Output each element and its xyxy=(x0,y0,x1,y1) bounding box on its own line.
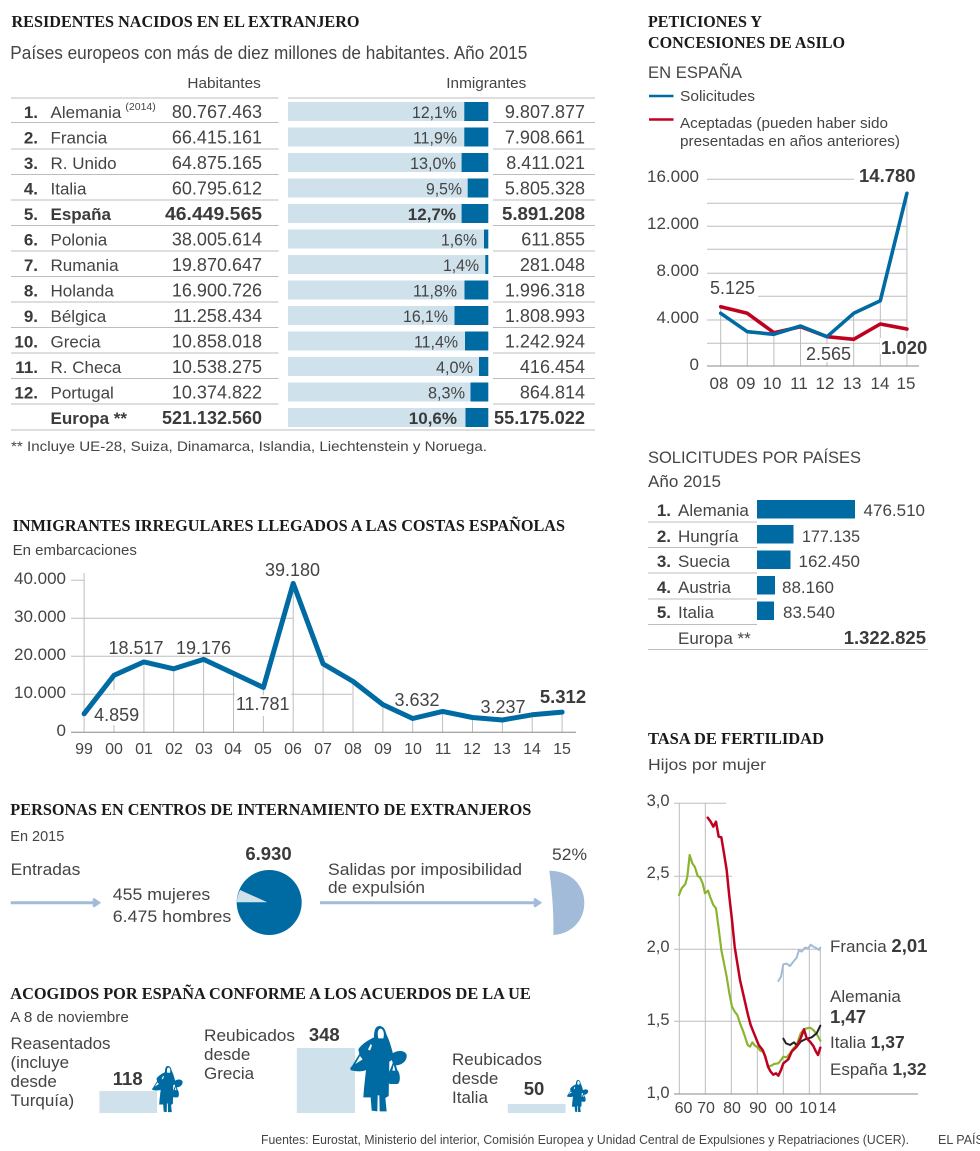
label: reasentados xyxy=(10,1034,110,1110)
label: reasentados: (incluye xyxy=(10,1053,69,1072)
x axis labels: 11 xyxy=(435,741,451,758)
table: rank column: 11. xyxy=(15,358,38,377)
table: country column: Rumania xyxy=(50,256,119,275)
table: rank column: 10. xyxy=(14,332,38,352)
ranks: 3. xyxy=(657,552,671,571)
heading: inmigrantes irregulares: INMIGRANTES IRREGULARES LLEGADOS A LAS COSTAS ESPAÑOLAS xyxy=(13,516,565,535)
x axis labels: 14 xyxy=(871,374,889,393)
table: habitantes column: 16.900.726 xyxy=(172,280,262,300)
x axis labels: 09 xyxy=(737,374,755,393)
line chart: fertility curves xyxy=(679,818,820,1076)
ranks: 5. xyxy=(657,603,671,622)
country names: Hungría xyxy=(678,527,739,546)
line: Francia xyxy=(778,945,820,981)
y axis labels: 0 xyxy=(57,721,66,740)
arrow: entradas xyxy=(11,899,99,906)
line: España xyxy=(708,818,820,1076)
y axis labels: 12.000 xyxy=(647,214,699,233)
table: inmigrantes column: 1.996.318 xyxy=(505,280,585,300)
line chart: solicitudes xyxy=(721,193,907,337)
table: habitantes column: 80.767.463 xyxy=(172,102,262,122)
subtitle: en España: EN ESPAÑA xyxy=(648,63,743,82)
panel: residentes nacidos en el extranjero xyxy=(10,12,595,454)
x axis labels: 02 xyxy=(165,741,183,758)
x axis labels: 15 xyxy=(553,741,571,758)
bar: Italia 50 xyxy=(508,1104,566,1113)
table: percentages: 1,4% xyxy=(443,256,479,275)
data labels: 2.565 xyxy=(806,344,851,364)
x axis labels: 08 xyxy=(344,741,362,758)
table: inmigrantes column: 611.855 xyxy=(521,230,585,250)
table: habitantes column: 46.449.565 xyxy=(165,203,262,224)
legend: Solicitudes xyxy=(680,88,755,105)
values: 1.322.825 xyxy=(844,627,926,648)
data labels: 39.180 xyxy=(265,560,320,580)
panel: tasa de fertilidad xyxy=(647,729,927,1117)
data labels: 11.781 xyxy=(236,694,290,714)
table: percentages xyxy=(403,103,479,428)
panel: peticiones de asilo xyxy=(647,12,930,393)
x axis labels: 13 xyxy=(493,741,511,758)
subtitle: residentes: Países europeos con más de diez millones de habitantes. Año 2015 xyxy=(10,43,527,63)
x axis labels: 13 xyxy=(843,374,861,393)
x axis labels: 70 xyxy=(697,1100,715,1117)
table: inmigrantes column: 864.814 xyxy=(520,382,585,402)
label: reasentados: Reasentados xyxy=(10,1034,110,1053)
table: percentages: 13,0% xyxy=(410,154,456,173)
table: country column: Holanda xyxy=(50,282,114,300)
label: salidas xyxy=(328,860,522,897)
label: reubicados desde Italia: desde xyxy=(452,1069,498,1088)
table: country column: Francia xyxy=(50,128,108,148)
label: reubicados desde Grecia xyxy=(204,1026,295,1083)
bars: percentage of immigrants xyxy=(288,102,488,427)
table: country column: Alemania xyxy=(50,103,122,122)
table: rank column: 9. xyxy=(24,307,38,326)
x axis labels: 10 xyxy=(404,741,422,758)
table: habitantes column: 38.005.614 xyxy=(172,230,262,250)
table: habitantes column: 10.858.018 xyxy=(172,332,262,352)
y axis labels: 30.000 xyxy=(14,607,66,626)
table: country column: Italia xyxy=(50,180,87,198)
y axis labels: 3,0 xyxy=(647,792,670,810)
y axis labels: 2,0 xyxy=(647,938,670,956)
table: percentages: 11,9% xyxy=(413,128,457,148)
heading: residentes: RESIDENTES NACIDOS EN EL EXTRANJERO xyxy=(12,12,360,31)
series labels: Francia 2,01 xyxy=(830,935,927,956)
data labels: 3.632 xyxy=(394,690,440,710)
country names: Alemania xyxy=(678,501,749,520)
series labels xyxy=(830,935,927,1079)
table: inmigrantes column: 8.411.021 xyxy=(506,153,585,173)
x axis labels: 08 xyxy=(710,374,728,393)
x axis labels: 04 xyxy=(224,741,242,758)
y axis labels: 1,0 xyxy=(647,1084,670,1102)
country names: Austria xyxy=(678,578,731,597)
line chart: irregular arrivals xyxy=(84,583,562,720)
table: inmigrantes column: 1.808.993 xyxy=(505,306,585,326)
x axis labels: 01 xyxy=(135,741,153,758)
value: 348: 348 xyxy=(309,1024,340,1045)
table: inmigrantes column xyxy=(494,102,585,428)
x axis labels: 00 xyxy=(105,741,123,758)
values: 177.135 xyxy=(802,527,860,546)
text: mujeres y hombres xyxy=(113,885,231,926)
label: reubicados desde Italia: Reubicados xyxy=(452,1050,542,1069)
arrow: salidas xyxy=(320,899,540,906)
x axis labels: 14 xyxy=(523,741,541,758)
half pie: 52% xyxy=(549,871,584,935)
panel: solicitudes por países xyxy=(648,448,928,650)
table: rank column: 6. xyxy=(24,230,38,250)
x axis labels: 90 xyxy=(749,1100,767,1117)
table: habitantes column: 60.795.612 xyxy=(172,178,262,198)
source line: Fuentes: Eurostat, Ministerio del interior, Comisión Europea y Unidad Central de Expulsiones y Repatriaciones (UCER). xyxy=(261,1133,909,1147)
values: 83.540 xyxy=(783,603,835,622)
data labels: 4.859 xyxy=(94,705,139,725)
values: 162.450 xyxy=(799,552,860,571)
x axis labels: 00 xyxy=(775,1100,793,1117)
data labels: 3.237 xyxy=(480,697,526,717)
table: habitantes column: 10.538.275 xyxy=(172,357,262,377)
table: inmigrantes column: 5.805.328 xyxy=(505,178,585,198)
table: country column: (2014) xyxy=(125,101,156,113)
y axis labels: 20.000 xyxy=(14,645,66,664)
icon: person small xyxy=(152,1066,183,1112)
heading: peticiones xyxy=(648,12,845,52)
label: entradas: Entradas xyxy=(11,860,80,879)
data labels: 19.176 xyxy=(176,638,231,658)
x axis labels xyxy=(75,741,571,758)
ranks: 1. xyxy=(657,501,671,520)
table: rank column: 7. xyxy=(24,256,38,275)
data labels: 14.780 xyxy=(859,165,916,186)
x axis labels: 05 xyxy=(254,741,272,758)
y axis labels: 2,5 xyxy=(647,864,670,882)
heading: centros de internamiento: PERSONAS EN CENTROS DE INTERNAMIENTO DE EXTRANJEROS xyxy=(10,800,531,819)
label: salidas: Salidas por imposibilidad xyxy=(328,860,522,879)
table: habitantes column xyxy=(162,102,262,428)
label: reubicados desde Italia: Italia xyxy=(452,1088,488,1107)
heading: acogidos: ACOGIDOS POR ESPAÑA CONFORME A LOS ACUERDOS DE LA UE xyxy=(10,984,531,1003)
subtitle: año 2015: Año 2015 xyxy=(648,472,721,491)
x axis labels: 14 xyxy=(819,1100,836,1117)
legend: presentadas en años anteriores) xyxy=(680,133,900,150)
country names xyxy=(678,501,751,648)
icon: person tiny xyxy=(567,1080,588,1112)
bar: Grecia 348 xyxy=(297,1048,355,1113)
table: country column: R. Checa xyxy=(50,358,122,377)
bars: by country xyxy=(757,500,855,620)
table: country column xyxy=(50,101,156,428)
ranks: 2. xyxy=(657,527,671,546)
ranks: 4. xyxy=(657,578,671,597)
value: 50: 50 xyxy=(524,1078,544,1099)
table: inmigrantes column: 281.048 xyxy=(520,255,585,275)
table: habitantes column: 10.374.822 xyxy=(172,382,262,402)
panel: acogidos por España xyxy=(10,984,588,1113)
table: percentages: 9,5% xyxy=(426,180,462,198)
table: inmigrantes column: 7.908.661 xyxy=(505,128,585,148)
table: habitantes column: 64.875.165 xyxy=(172,153,262,173)
table: percentages: 1,6% xyxy=(441,230,477,250)
table: rank column: 1. xyxy=(24,103,38,122)
table: percentages: 11,8% xyxy=(413,282,457,300)
table: percentages: 8,3% xyxy=(428,384,465,402)
value: 52%: 52% xyxy=(552,845,587,864)
x axis labels: 80 xyxy=(723,1100,741,1117)
subtitle: fecha: A 8 de noviembre xyxy=(10,1009,129,1026)
data labels xyxy=(710,165,930,364)
y axis labels: 40.000 xyxy=(14,569,66,588)
x axis labels: 10 xyxy=(763,374,781,393)
text: mujeres y hombres: 6.475 hombres xyxy=(113,907,231,926)
table: country column: Grecia xyxy=(50,332,101,352)
table: inmigrantes column: 9.807.877 xyxy=(505,102,585,122)
label: reasentados: Turquía) xyxy=(10,1091,74,1110)
series labels: Italia 1,37 xyxy=(830,1032,905,1052)
y axis labels: 4.000 xyxy=(656,308,699,327)
heading: peticiones: CONCESIONES DE ASILO xyxy=(648,33,845,52)
data labels: 5.125 xyxy=(710,278,755,298)
table: percentages: 4,0% xyxy=(436,358,473,377)
x axis labels xyxy=(675,1100,836,1117)
data labels: 1.020 xyxy=(881,337,927,358)
ranks xyxy=(657,501,671,622)
x axis labels: 12 xyxy=(816,374,834,393)
country names: Europa ** xyxy=(678,629,751,648)
value: 118: 118 xyxy=(113,1068,143,1089)
table: percentages: 16,1% xyxy=(403,307,448,326)
heading: peticiones: PETICIONES Y xyxy=(648,12,762,31)
table: country column: Polonia xyxy=(50,230,108,250)
table: rank column xyxy=(14,103,38,402)
x axis labels: 06 xyxy=(284,741,302,758)
y axis labels: 1,5 xyxy=(647,1011,670,1029)
x axis labels: 15 xyxy=(897,374,915,393)
x axis labels: 10 xyxy=(799,1100,817,1117)
table: country column: Bélgica xyxy=(50,307,107,326)
column header: inmigrantes: Inmigrantes xyxy=(446,75,526,92)
x axis labels: 12 xyxy=(463,741,481,758)
table: habitantes column: 11.258.434 xyxy=(173,306,262,326)
label: salidas: de expulsión xyxy=(328,878,425,897)
subtitle: en 2015: En 2015 xyxy=(10,828,64,845)
x axis labels: 03 xyxy=(195,741,213,758)
icon: person large xyxy=(350,1026,407,1111)
y axis labels: 16.000 xyxy=(647,167,699,186)
table: habitantes column: 19.870.647 xyxy=(172,255,262,275)
country names: Italia xyxy=(678,603,714,622)
x axis labels: 11 xyxy=(790,374,808,393)
label: reubicados desde Grecia: desde xyxy=(204,1045,250,1064)
values xyxy=(782,501,926,648)
x axis labels: 60 xyxy=(675,1100,692,1117)
y axis labels: 8.000 xyxy=(656,261,699,280)
label: reubicados desde Grecia: Reubicados xyxy=(204,1026,295,1045)
footnote: ** Incluye UE-28, Suiza, Dinamarca, Islandia, Liechtenstein y Noruega. xyxy=(11,438,487,454)
country names: Suecia xyxy=(678,552,731,571)
legend xyxy=(649,88,900,150)
y axis labels xyxy=(647,167,699,374)
heading: tasa de fertilidad: TASA DE FERTILIDAD xyxy=(648,729,824,748)
table: percentages: 11,4% xyxy=(414,332,458,352)
subtitle: en embarcaciones: En embarcaciones xyxy=(13,542,137,559)
table: percentages: 12,1% xyxy=(412,103,457,122)
values: 476.510 xyxy=(864,501,925,520)
heading: solicitudes por países: SOLICITUDES POR PAÍSES xyxy=(648,448,861,467)
text: mujeres y hombres: 455 mujeres xyxy=(113,885,210,904)
table: habitantes column: 521.132.560 xyxy=(162,407,262,428)
panel: personas en centros de internamiento xyxy=(10,800,587,935)
line: Italia xyxy=(679,855,820,1067)
table: rank column: 12. xyxy=(14,384,38,402)
subtitle: hijos por mujer: Hijos por mujer xyxy=(648,757,767,774)
x axis labels: 99 xyxy=(75,741,93,758)
table: habitantes column: 66.415.161 xyxy=(172,128,262,148)
x axis labels: 09 xyxy=(374,741,392,758)
y axis labels xyxy=(647,792,670,1102)
table: country column: Europa ** xyxy=(50,409,127,428)
table: rank column: 8. xyxy=(24,282,38,300)
legend: Aceptadas (pueden haber sido xyxy=(680,115,888,132)
label: reubicados desde Italia xyxy=(452,1050,542,1107)
table: inmigrantes column: 1.242.924 xyxy=(505,332,585,352)
values: 88.160 xyxy=(782,578,834,597)
panel: inmigrantes irregulares xyxy=(13,516,586,758)
table: inmigrantes column: 55.175.022 xyxy=(494,407,585,428)
series labels: 1,47 xyxy=(830,1006,866,1027)
label: reasentados: desde xyxy=(10,1072,57,1091)
series labels: Alemania xyxy=(830,987,901,1006)
table: country column: Portugal xyxy=(50,384,114,402)
line chart: aceptadas xyxy=(721,307,907,339)
value: 6.930: 6.930 xyxy=(245,843,292,864)
y axis labels: 0 xyxy=(690,355,699,374)
column header: habitantes: Habitantes xyxy=(187,75,261,92)
table: rank column: 4. xyxy=(24,180,38,198)
data labels: 18.517 xyxy=(108,638,164,658)
bar: reasentados 118 xyxy=(99,1091,157,1113)
table: country column: España xyxy=(50,205,112,224)
y axis labels: 10.000 xyxy=(14,683,66,702)
pie chart: hombres y mujeres xyxy=(237,870,302,935)
series labels: España 1,32 xyxy=(830,1059,927,1079)
table: rank column: 5. xyxy=(24,205,38,224)
line: Alemania xyxy=(783,1026,820,1046)
table: rank column: 2. xyxy=(24,128,38,148)
y axis labels xyxy=(14,569,66,740)
table: country column: R. Unido xyxy=(50,154,117,173)
data labels: 5.312 xyxy=(540,686,586,707)
x axis labels: 07 xyxy=(314,741,332,758)
table: percentages: 12,7% xyxy=(408,205,456,224)
table: inmigrantes column: 416.454 xyxy=(520,357,585,377)
label: reubicados desde Grecia: Grecia xyxy=(204,1064,255,1083)
data labels xyxy=(94,560,586,725)
table: percentages: 10,6% xyxy=(409,409,457,428)
table: inmigrantes column: 5.891.208 xyxy=(502,203,585,224)
x axis labels xyxy=(710,374,915,393)
table: rank column: 3. xyxy=(24,154,38,173)
